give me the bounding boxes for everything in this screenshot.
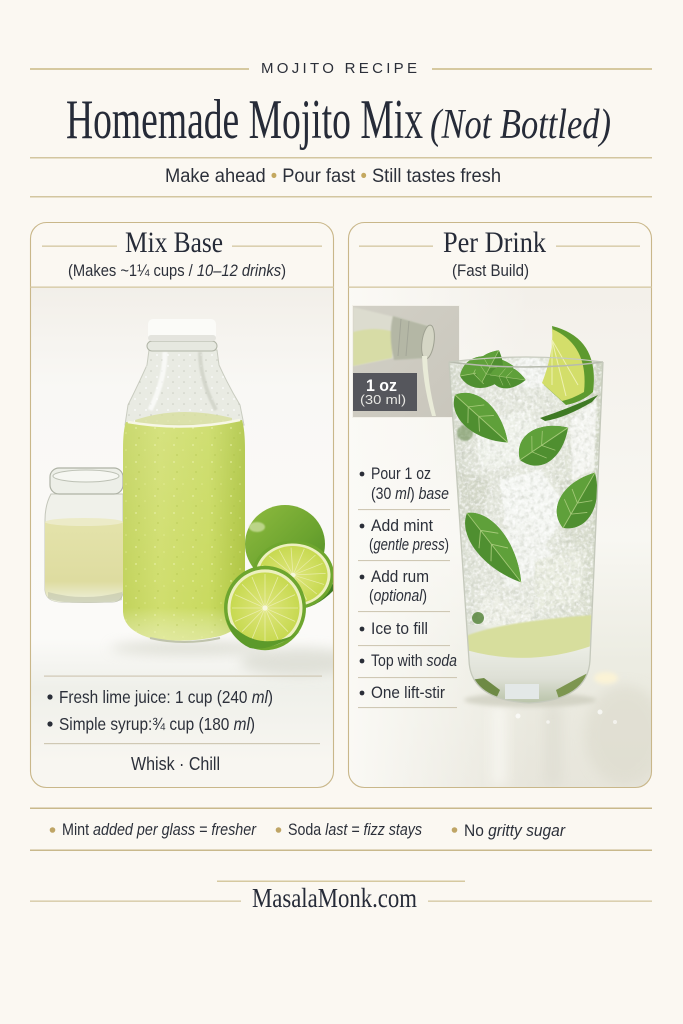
step: pour base: (30 ml) base xyxy=(371,485,449,503)
panel heading: per drink: (Fast Build) xyxy=(452,262,529,280)
step: add rum xyxy=(360,567,429,605)
step: add mint: Add mint xyxy=(371,516,433,535)
step: add rum: Add rum xyxy=(371,567,429,586)
panel heading: mix base: (Makes ~1¼ cups / 10–12 drinks) xyxy=(68,262,286,280)
footer: site name: MasalaMonk.com xyxy=(252,883,417,913)
panel: per drink xyxy=(348,222,665,788)
dose label xyxy=(353,373,417,411)
mix base ingredients: Simple syrup:¾ cup (180 ml) xyxy=(59,714,255,734)
benefits strip xyxy=(30,808,652,851)
dose label: (30 ml) xyxy=(360,392,406,407)
muddled lime layer xyxy=(466,615,592,659)
mix base ingredients: Whisk · Chill xyxy=(131,753,220,774)
mint leaves xyxy=(444,344,610,592)
panel heading: per drink xyxy=(359,226,640,280)
step: add rum: (optional) xyxy=(369,587,427,605)
poured bottle xyxy=(353,307,436,366)
step: ice: Ice to fill xyxy=(371,619,428,638)
ice cubes xyxy=(462,358,598,628)
benefit: mint: Mint added per glass = fresher xyxy=(62,820,257,839)
panel heading: mix base xyxy=(42,226,322,280)
benefit: soda: Soda last = fizz stays xyxy=(288,820,422,839)
lime wedge xyxy=(542,326,594,405)
panel: mix base xyxy=(30,222,360,788)
mix base ingredients xyxy=(44,676,322,774)
dose label: 1 oz xyxy=(366,377,397,395)
panel heading: per drink: Per Drink xyxy=(443,226,546,259)
icon: syrup jar xyxy=(45,468,123,603)
icon: limes xyxy=(224,505,346,650)
title: Homemade Mojito Mix xyxy=(66,89,423,151)
inset photo: pouring base xyxy=(352,305,460,418)
step: pour base xyxy=(360,464,449,503)
per drink steps xyxy=(358,464,457,708)
benefit: sugar: No gritty sugar xyxy=(464,821,566,840)
tagline band: Make ahead • Pour fast • Still tastes fresh xyxy=(165,166,501,187)
mix base ingredients: Fresh lime juice: 1 cup (240 ml) xyxy=(59,687,273,707)
icon: lime juice bottle xyxy=(123,319,245,642)
photo background: per drink xyxy=(421,591,651,787)
step: stir: One lift-stir xyxy=(371,683,445,702)
panel heading: mix base: Mix Base xyxy=(125,226,223,259)
icon: mojito glass xyxy=(444,326,610,707)
step: soda: Top with soda xyxy=(371,651,457,670)
step: add mint: (gentle press) xyxy=(369,536,449,554)
photo background: mix base xyxy=(31,288,333,720)
step: pour base: Pour 1 oz xyxy=(371,464,431,483)
step: add mint xyxy=(360,516,449,554)
heavy base xyxy=(469,646,590,702)
eyebrow: mojito recipe: MOJITO RECIPE xyxy=(261,60,417,77)
infographic canvas xyxy=(30,63,652,908)
title: (Not Bottled) xyxy=(430,102,611,148)
